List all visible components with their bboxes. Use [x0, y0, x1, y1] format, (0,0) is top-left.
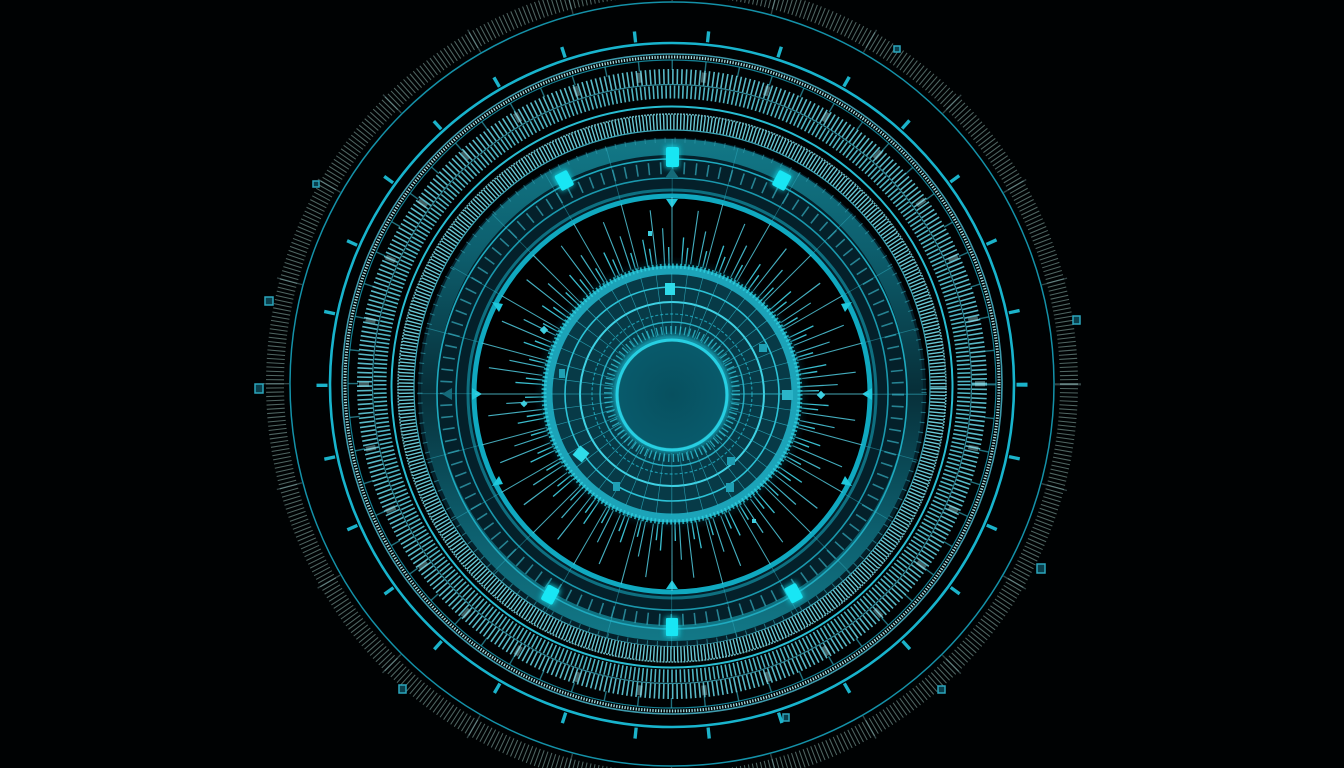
sparse ticks in gap — [353, 65, 991, 703]
disc data blocks — [559, 283, 793, 492]
tick band one — [364, 76, 980, 692]
tick band two — [372, 84, 972, 684]
teal instrument band — [420, 140, 924, 644]
middle disc — [543, 265, 801, 523]
dotted ring — [342, 54, 1002, 714]
glowing markers — [540, 146, 804, 637]
big inner ring — [474, 196, 870, 592]
outer scale data boxes — [255, 46, 1080, 721]
divider ring — [392, 106, 952, 668]
radial spokes — [509, 231, 835, 557]
outer scale ring — [275, 0, 1069, 768]
spoke node icons — [520, 231, 825, 523]
central black field — [475, 197, 869, 591]
ring pointers — [442, 168, 872, 589]
core lens — [616, 338, 728, 450]
dense data band — [398, 114, 946, 662]
outer bright ring with ticks — [322, 35, 1022, 735]
